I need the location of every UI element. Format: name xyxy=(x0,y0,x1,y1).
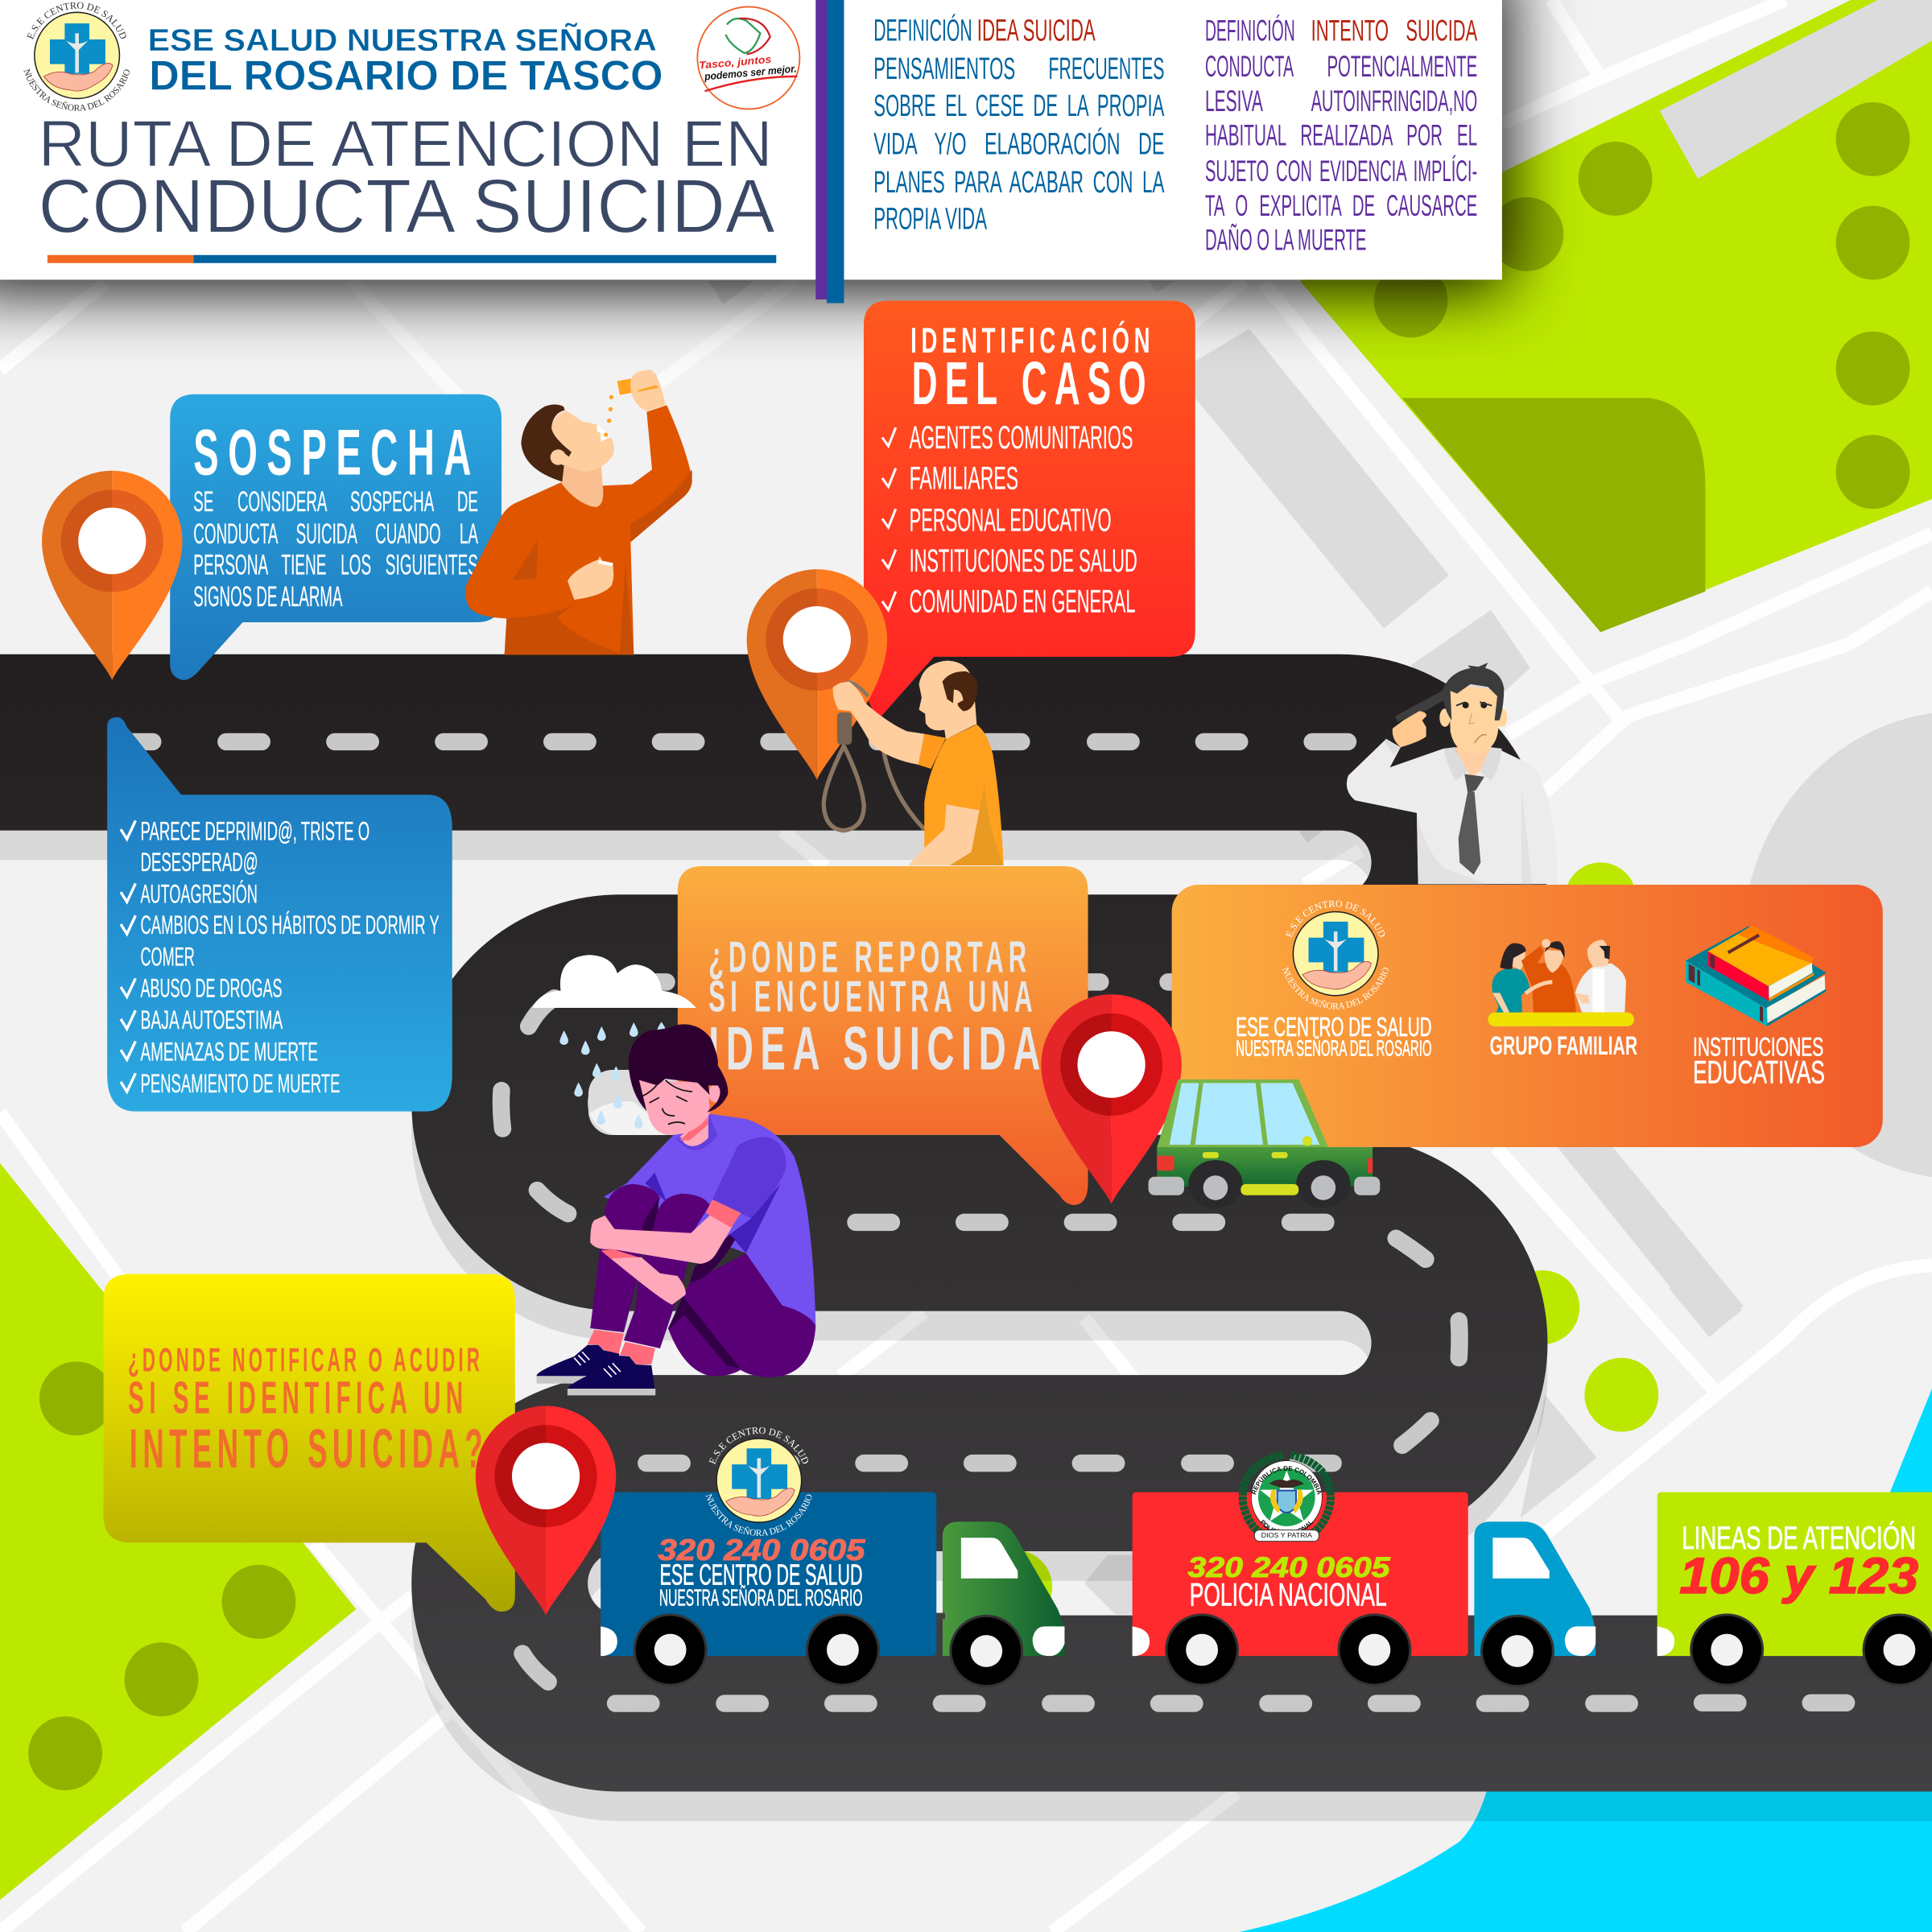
label: instituciones educativas: EDUCATIVAS xyxy=(1693,1055,1825,1090)
sospecha description: SE CONSIDERA SOSPECHA DE xyxy=(193,486,478,518)
heading: dónde notificar xyxy=(128,1342,488,1480)
agents list: COMUNIDAD EN GENERAL xyxy=(910,584,1135,620)
definition: intento suicida: SUJETO CON EVIDENCIA IMPLÍCI- xyxy=(1205,155,1477,188)
truck phone and name: NUESTRA SEÑORA DEL ROSARIO xyxy=(659,1584,862,1610)
agents list: INSTITUCIONES DE SALUD xyxy=(910,543,1137,579)
green block: bottom left xyxy=(0,1163,356,1900)
agents list: PERSONAL EDUCATIVO xyxy=(910,503,1112,539)
logo: E.S.E centro de salud xyxy=(705,1426,811,1536)
check marks xyxy=(121,820,135,1092)
logo: E.S.E centro de salud: E.S.E CENTRO DE SALUD xyxy=(708,1426,808,1465)
figure: sad girl xyxy=(537,1022,815,1395)
green dots on the map xyxy=(978,862,1658,1624)
winding road xyxy=(0,742,1932,1733)
definition: intento suicida: LESIVA xyxy=(1205,85,1263,118)
label: instituciones educativas xyxy=(1693,1033,1825,1090)
panel: identificación del caso xyxy=(864,300,1195,720)
agents list xyxy=(910,420,1137,620)
label: ESE centro de salud xyxy=(1236,1013,1432,1061)
heading: dónde reportar: ¿DONDE REPORTAR xyxy=(708,932,1031,982)
figure: man with noose xyxy=(824,661,1004,865)
panel: dónde reportar, entidades xyxy=(1172,885,1883,1147)
emblem: policía nacional xyxy=(1238,1451,1335,1542)
definition: intento suicida: SUICIDA xyxy=(1406,14,1478,47)
location pin 1 xyxy=(42,471,183,680)
warning signs list: PENSAMIENTO DE MUERTE xyxy=(140,1069,340,1098)
location pin 4 xyxy=(476,1406,616,1616)
heading: dónde notificar: SI SE IDENTIFICA UN xyxy=(128,1373,469,1424)
definition: intento suicida xyxy=(1205,14,1478,257)
label: ESE centro de salud: NUESTRA SEÑORA DEL ROSARIO xyxy=(1236,1036,1432,1061)
main title: CONDUCTA SUICIDA xyxy=(38,164,775,250)
emblem: policía nacional: DIOS Y PATRIA xyxy=(1261,1531,1312,1539)
sospecha description: CONDUCTA SUICIDA CUANDO LA xyxy=(193,518,478,550)
warning signs list: ABUSO DE DROGAS xyxy=(140,973,283,1002)
heading: dónde reportar xyxy=(708,932,1047,1084)
definition: intento suicida: DEFINICIÓN xyxy=(1205,14,1295,47)
agents list: FAMILIARES xyxy=(910,461,1018,497)
organisation name xyxy=(148,23,663,100)
icon: books xyxy=(1686,925,1827,1026)
figure: man with gun xyxy=(1347,663,1558,884)
truck: líneas de atención xyxy=(1657,1492,1932,1685)
warning signs list: DESESPERAD@ xyxy=(140,848,258,877)
definition: intento suicida: POTENCIALMENTE xyxy=(1327,50,1477,83)
heading: identificación del caso: DEL CASO xyxy=(912,349,1154,417)
warning signs list: AUTOAGRESIÓN xyxy=(140,879,258,908)
definition: intento suicida: CONDUCTA xyxy=(1205,50,1294,83)
panel: dónde reportar xyxy=(678,866,1088,1205)
definition: idea suicida: PROPIA VIDA xyxy=(873,202,987,237)
icon: family group xyxy=(1488,939,1634,1026)
truck phone and name: 320 240 0605 xyxy=(658,1534,865,1567)
warning signs list xyxy=(140,816,440,1098)
logo: Tasco juntos: podemos ser mejor. xyxy=(704,63,797,83)
logo: E.S.E centro de salud: NUESTRA SEÑORA DEL ROSARIO xyxy=(705,1493,811,1536)
sospecha description: PERSONA TIENE LOS SIGUIENTES xyxy=(193,549,478,580)
label: grupo familiar: GRUPO FAMILIAR xyxy=(1490,1031,1637,1060)
warning signs list: COMER xyxy=(140,943,195,972)
truck: ESE centro de salud xyxy=(601,1426,1064,1687)
definition: intento suicida: AUTOINFRINGIDA,NO xyxy=(1311,85,1477,118)
car xyxy=(1149,1080,1380,1208)
logo: E.S.E centro de salud xyxy=(1282,900,1389,1009)
hotline label and numbers xyxy=(1679,1520,1918,1604)
organisation name: DEL ROSARIO DE TASCO xyxy=(149,53,663,100)
figure: man swallowing pills xyxy=(465,369,692,654)
rain cloud xyxy=(532,955,696,1008)
truck: policía nacional xyxy=(1132,1451,1596,1687)
heading: dónde notificar: INTENTO SUICIDA? xyxy=(130,1418,488,1480)
heading: identificación del caso: IDENTIFICACIÓN xyxy=(910,320,1154,361)
logo: Tasco juntos: Tasco, juntos xyxy=(699,53,772,72)
logo: E.S.E centro de salud: NUESTRA SEÑORA DEL ROSARIO xyxy=(1282,967,1389,1009)
green block: top right xyxy=(1300,0,1932,632)
agents list: AGENTES COMUNITARIOS xyxy=(910,420,1133,456)
warning signs list: BAJA AUTOESTIMA xyxy=(140,1005,283,1034)
truck phone and name xyxy=(1188,1552,1390,1612)
definition: intento suicida: DAÑO O LA MUERTE xyxy=(1205,224,1366,257)
panel: sospecha xyxy=(170,394,502,680)
road dashes xyxy=(109,733,1855,1712)
definition: intento suicida: TA O EXPLICITA DE CAUSARCE xyxy=(1205,189,1477,222)
header accent bars xyxy=(815,0,844,303)
sospecha description: SIGNOS DE ALARMA xyxy=(193,581,343,613)
location pin 2 xyxy=(747,569,887,780)
definition: idea suicida: DEFINICIÓN xyxy=(873,14,972,48)
panel: signos de alarma xyxy=(107,717,452,1112)
definition: idea suicida: PENSAMIENTOS xyxy=(873,52,1015,86)
heading: identificación del caso xyxy=(910,320,1154,417)
logo: Tasco juntos xyxy=(697,6,799,109)
warning signs list: AMENAZAS DE MUERTE xyxy=(140,1037,318,1066)
water area: bottom right xyxy=(1240,1389,1932,1932)
definition: idea suicida xyxy=(873,14,1165,237)
header panel xyxy=(0,0,1534,336)
heading: dónde reportar: IDEA SUICIDA xyxy=(708,1015,1047,1084)
definition: idea suicida: VIDA Y/O ELABORACIÓN DE xyxy=(873,126,1164,161)
definition: idea suicida: FRECUENTES xyxy=(1049,52,1164,86)
emblem: policía nacional: POLICÍA NACIONAL xyxy=(1261,1520,1314,1530)
label: ESE centro de salud: ESE CENTRO DE SALUD xyxy=(1236,1013,1432,1042)
definition: idea suicida: PLANES PARA ACABAR CON LA xyxy=(873,165,1165,200)
truck phone and name: 320 240 0605 xyxy=(1188,1552,1390,1583)
main title: RUTA DE ATENCION EN xyxy=(38,108,773,181)
logo: E.S.E centro de salud: E.S.E CENTRO DE SALUD xyxy=(27,2,126,40)
organisation name: ESE SALUD NUESTRA SEÑORA xyxy=(148,23,657,58)
title underline xyxy=(47,255,776,263)
warning signs list: CAMBIOS EN LOS HÁBITOS DE DORMIR Y xyxy=(140,910,440,939)
main title xyxy=(38,108,775,250)
logo: E.S.E centro de salud xyxy=(23,2,130,111)
definition: idea suicida: IDEA SUICIDA xyxy=(977,14,1096,48)
heading: dónde notificar: ¿DONDE NOTIFICAR O ACUDIR xyxy=(128,1342,483,1379)
hotline label and numbers: 106 y 123 xyxy=(1679,1548,1918,1604)
definition: intento suicida: INTENTO xyxy=(1311,14,1389,47)
emblem: policía nacional: REPÚBLICA DE COLOMBIA xyxy=(1252,1466,1322,1495)
heading: sospecha: SOSPECHA xyxy=(193,416,481,489)
sospecha description xyxy=(193,486,478,613)
heading: dónde reportar: SI ENCUENTRA UNA xyxy=(708,972,1038,1022)
check marks xyxy=(882,427,896,610)
truck phone and name xyxy=(658,1534,865,1610)
label: instituciones educativas: INSTITUCIONES xyxy=(1693,1033,1823,1062)
truck phone and name: ESE CENTRO DE SALUD xyxy=(660,1558,862,1591)
logo: E.S.E centro de salud: NUESTRA SEÑORA DEL ROSARIO xyxy=(23,68,130,111)
definition: idea suicida: SOBRE EL CESE DE LA PROPIA xyxy=(873,89,1165,123)
definition: intento suicida: HABITUAL REALIZADA POR EL xyxy=(1205,119,1477,152)
truck phone and name: POLICIA NACIONAL xyxy=(1190,1577,1387,1612)
warning signs list: PARECE DEPRIMID@, TRISTE O xyxy=(140,816,369,845)
panel: dónde notificar xyxy=(104,1274,515,1612)
logo: E.S.E centro de salud: E.S.E CENTRO DE SALUD xyxy=(1286,900,1385,938)
location pin 3 xyxy=(1041,994,1182,1203)
